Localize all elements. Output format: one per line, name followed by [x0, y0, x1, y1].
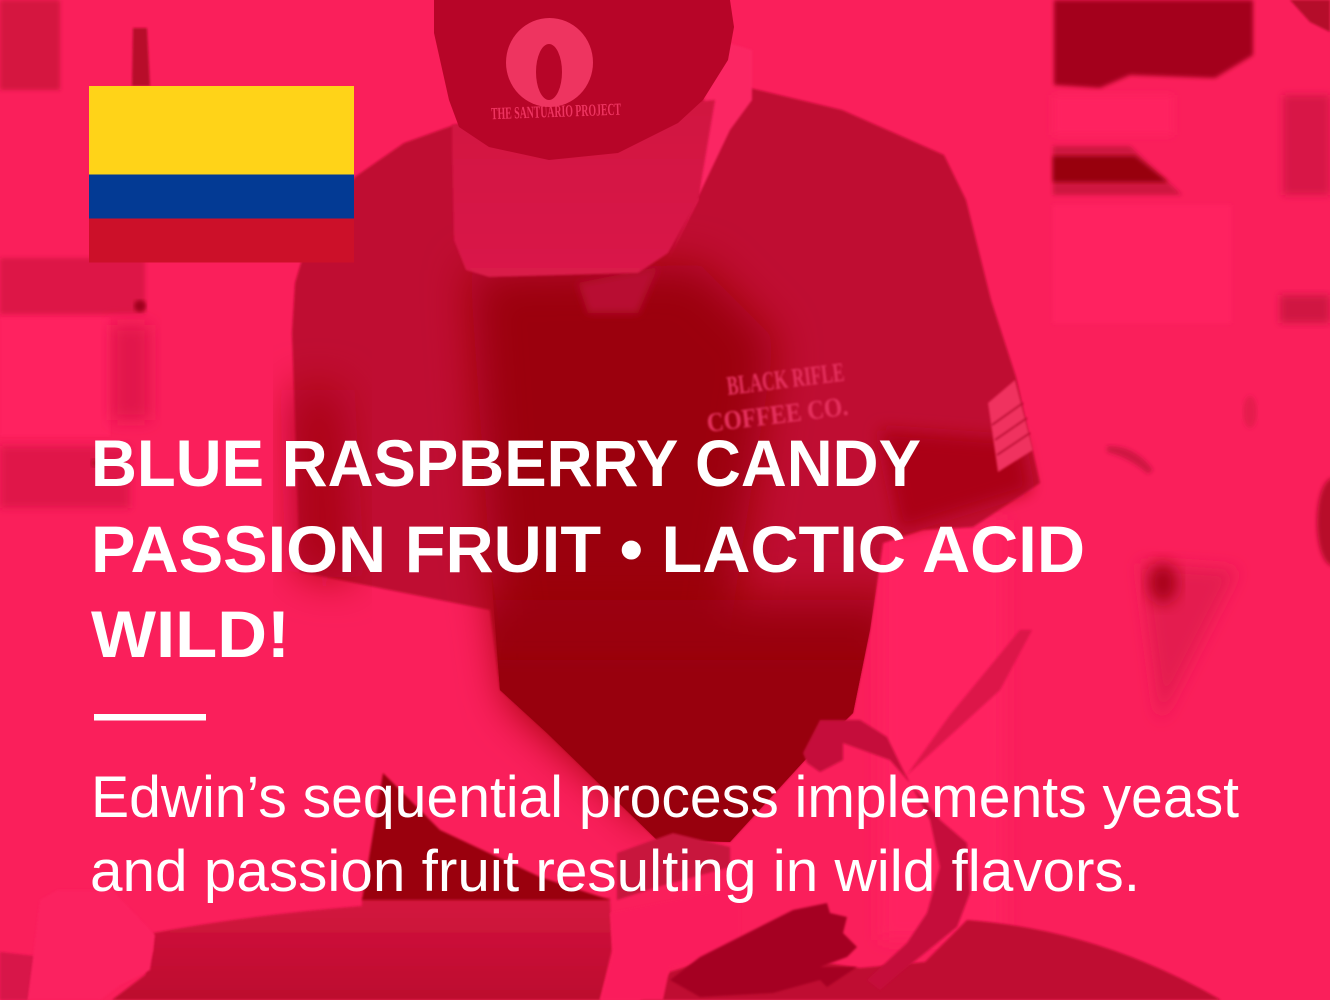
- man: hands and wrap: [600, 720, 970, 1000]
- cap badge: [506, 18, 593, 107]
- man: t-shirt: [292, 88, 1040, 900]
- flag of Colombia: [89, 86, 354, 262]
- body text: and passion fruit resulting in wild flavors.: [90, 839, 1140, 904]
- bowl: [112, 898, 1221, 1000]
- background: top-right dark shelf: [1053, 0, 1330, 323]
- heading: BLUE RASPBERRY CANDY: [91, 426, 921, 500]
- heading: PASSION FRUIT • LACTIC ACID: [91, 512, 1085, 586]
- left gripping hand: [617, 833, 730, 900]
- cap visor: [452, 100, 715, 277]
- background: left blurred shapes: [0, 0, 150, 1000]
- pale wedge: [600, 887, 740, 1000]
- body text: Edwin’s sequential process implements yeast: [91, 765, 1239, 830]
- man: ear strap: [668, 43, 752, 260]
- wrap over fruit: [803, 720, 970, 990]
- lower-left arm shadow: [362, 773, 610, 900]
- glove: [670, 903, 857, 997]
- divider rule: [94, 714, 206, 720]
- heading: WILD!: [91, 597, 290, 671]
- sleeve flag patch: [988, 380, 1033, 472]
- background: right blurred forms: [880, 335, 1330, 1000]
- shirt logo text: BLACK RIFLE: [725, 357, 846, 401]
- beard: [578, 267, 658, 313]
- shirt logo text: [705, 357, 850, 438]
- body text: [90, 765, 1239, 904]
- man: cap: [434, 0, 734, 277]
- left knife: [28, 890, 155, 1000]
- heading: [91, 426, 1085, 671]
- shirt logo text: COFFEE CO.: [705, 391, 850, 438]
- cap crown: [434, 0, 734, 160]
- cap text: THE SANTUARIO PROJECT: [491, 100, 622, 123]
- shirt dark centre: [295, 265, 1030, 860]
